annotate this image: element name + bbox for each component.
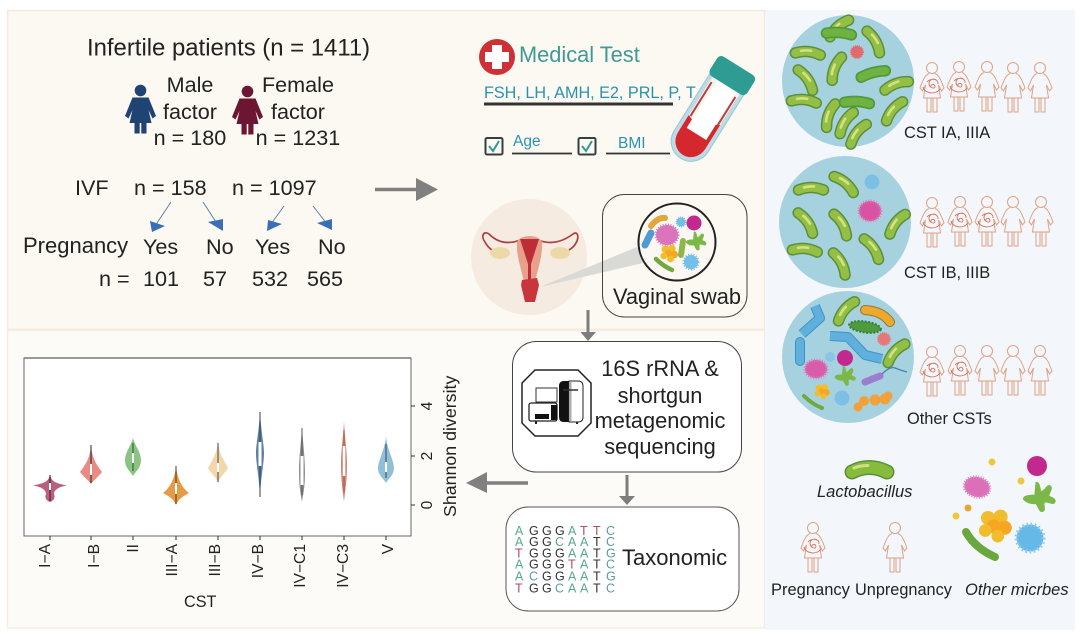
text: sequencing method [595,356,726,459]
violin: V [378,436,394,483]
text: pregnancy outcomes: No [206,234,234,259]
text: male factor: Male [167,72,213,97]
text: male factor [154,72,226,150]
text: outcome counts: n = [99,266,130,291]
text: female factor [256,72,340,150]
sequence alignment letters: GGG [529,546,565,560]
heading: infertile patients: Infertile patients (n = 1411) [87,34,370,62]
sequence alignment letters: GG [529,582,552,596]
icon: male figure [125,85,156,134]
text: sequencing method: 16S rRNA & [601,356,719,381]
legend: unpregnancy: Unpregnancy [855,581,953,599]
legend: pregnancy: Pregnancy [771,581,851,599]
icon: blood test tube [662,54,757,170]
sequence alignment letters: C [606,558,615,572]
sequence alignment letters: AA [568,582,589,596]
legend: Lactobacillus: Lactobacillus [817,483,912,501]
axis: CST categories: IV−C1 [292,544,309,588]
text: sequencing method: metagenomic [595,408,726,433]
axis: Shannon ticks: 0 [419,500,436,509]
sequence alignment letters [515,524,616,596]
text: male factor: n = 180 [154,125,226,150]
sequence alignment letters: T [515,582,523,596]
text: outcome counts: 565 [307,266,343,291]
sequence alignment letters: AA [568,546,589,560]
text: female factor: n = 1231 [256,125,340,150]
text: outcome counts: 57 [203,266,227,291]
icon: female figure [232,86,263,134]
text: outcome counts: 532 [252,266,288,291]
sequence alignment letters: A [515,558,524,572]
illustration: uterus [471,199,587,315]
axis: Shannon ticks [411,401,436,509]
axis: CST categories: IV−B [250,544,267,578]
violin: II [125,438,141,476]
arrow: cohort to tests [375,178,438,201]
violin: IV-B [256,412,264,497]
sequence alignment letters: A [515,570,524,584]
sequence alignment letters: GG [529,535,552,549]
text: pregnancy outcomes: Pregnancy [23,233,128,258]
text: IVF counts [75,175,317,200]
sequence alignment letters: T [515,546,523,560]
chart: Shannon diversity violins [24,358,460,611]
text: taxonomic: Taxonomic [622,545,727,570]
sequence alignment letters: GG [542,570,565,584]
sequence alignment letters: A [580,558,589,572]
sequence alignment letters: C [555,582,564,596]
arrow: sequencing to chart [466,472,528,493]
icons: women row 1 [920,62,1052,112]
sequence alignment letters: A [515,524,524,538]
axis title: CST: CST [184,593,216,611]
arrows: pregnancy outcome splits [150,202,332,232]
text: pregnancy outcomes: Yes [143,234,178,259]
checkbox: age: Age [513,133,541,150]
axis: CST categories [37,536,397,588]
label: CST IB, IIIB: CST IB, IIIB [904,264,990,282]
box: taxonomic [506,507,739,611]
text: pregnancy outcomes: No [318,234,346,259]
sequence alignment letters: GGG [529,558,565,572]
legend: other microbes: Other micrbes [965,581,1069,599]
label: other CSTs: Other CSTs [907,410,992,428]
text: pregnancy outcomes: Yes [255,234,290,259]
legend: pregnancy [771,522,851,599]
legend: unpregnancy [855,522,953,599]
sequence alignment letters: A [515,535,524,549]
checkbox: BMI: BMI [618,135,646,152]
text: male factor: factor [163,99,217,124]
text: pregnancy outcomes [23,233,346,259]
microbiome circle: CST IA, IIIA [782,15,914,147]
text: IVF counts: n = 158 [134,175,207,200]
text: hormone list: FSH, LH, AMH, E2, PRL, P, T [484,84,696,102]
sequence alignment letters: T [593,535,601,549]
axis: Shannon ticks: 4 [419,401,436,410]
sequence alignment letters: G [606,570,616,584]
axis: CST categories: I−A [37,543,54,568]
label: CST IA, IIIA: CST IA, IIIA [904,124,990,142]
axis title: Shannon diversity: Shannon diversity [440,376,460,517]
box: sequencing [512,342,742,472]
checkbox: BMI [578,135,670,154]
icons: women row 3 [920,346,1052,396]
sequence alignment letters: C [555,535,564,549]
checkbox: age [486,133,572,154]
text: IVF counts: n = 1097 [232,175,317,200]
axis: CST categories: V [380,543,397,554]
sequence alignment letters: C [529,570,538,584]
sequence alignment letters: GGG [529,524,565,538]
icon: medical cross [479,39,515,75]
panel: patient cohort and sampling [8,10,764,330]
box: vaginal swab: Vaginal swab [613,284,741,309]
panel: community state types [765,10,1075,630]
sequence alignment letters: T [593,582,601,596]
violin: IV-C1 [299,426,305,502]
text: female factor: Female [262,72,334,97]
legend: other microbes [952,456,1069,599]
sequence alignment letters: AA [568,535,589,549]
sequence alignment letters: AA [568,570,589,584]
violin: III-B [208,442,228,483]
text: outcome counts [99,266,343,291]
sequence alignment letters: C [606,535,615,549]
sequence alignment letters: A [568,524,577,538]
violin: III-A [163,466,189,505]
box: vaginal swab [602,194,747,317]
sequence alignment letters: G [606,546,616,560]
sequence alignment letters: T [568,558,576,572]
axis: Shannon ticks: 2 [419,452,436,460]
icon: swab microbes [638,204,716,280]
axis: CST categories: I−B [86,544,103,568]
icon: sequencer machine [522,370,591,436]
callout: zoom beam [540,247,643,287]
sequence alignment letters: T [593,546,601,560]
microbiome circle: other CSTs [782,291,914,423]
axis: CST categories: III−A [164,543,181,577]
text: IVF counts: IVF [75,175,109,200]
divider: hormone underline [484,102,673,106]
sequence alignment letters: C [606,582,615,596]
sequence alignment letters: TT [580,524,601,538]
legend: Lactobacillus [817,466,912,501]
sequence alignment letters: C [606,524,615,538]
axis: CST categories: III−B [207,544,224,577]
panel: sequencing and diversity chart [8,330,764,628]
violin: I-A [33,474,67,502]
violin: IV-C3 [341,421,347,502]
arrow: swab to sequencing [580,310,596,341]
text: outcome counts: 101 [143,266,179,291]
text: sequencing method: shortgun [618,383,702,408]
sequence alignment letters: T [593,570,601,584]
text: female factor: factor [271,99,325,124]
icons: women row 2 [920,196,1053,247]
sequence alignment letters: T [593,558,601,572]
arrow: sequencing to taxonomic [619,475,635,505]
text: sequencing method: sequencing [604,434,716,459]
heading: medical test: Medical Test [519,42,640,67]
violin: I-B [80,445,102,484]
axis: CST categories: IV−C3 [335,544,352,588]
axis: CST categories: II [125,544,142,553]
microbiome circle: CST IB, IIIB [779,156,911,288]
